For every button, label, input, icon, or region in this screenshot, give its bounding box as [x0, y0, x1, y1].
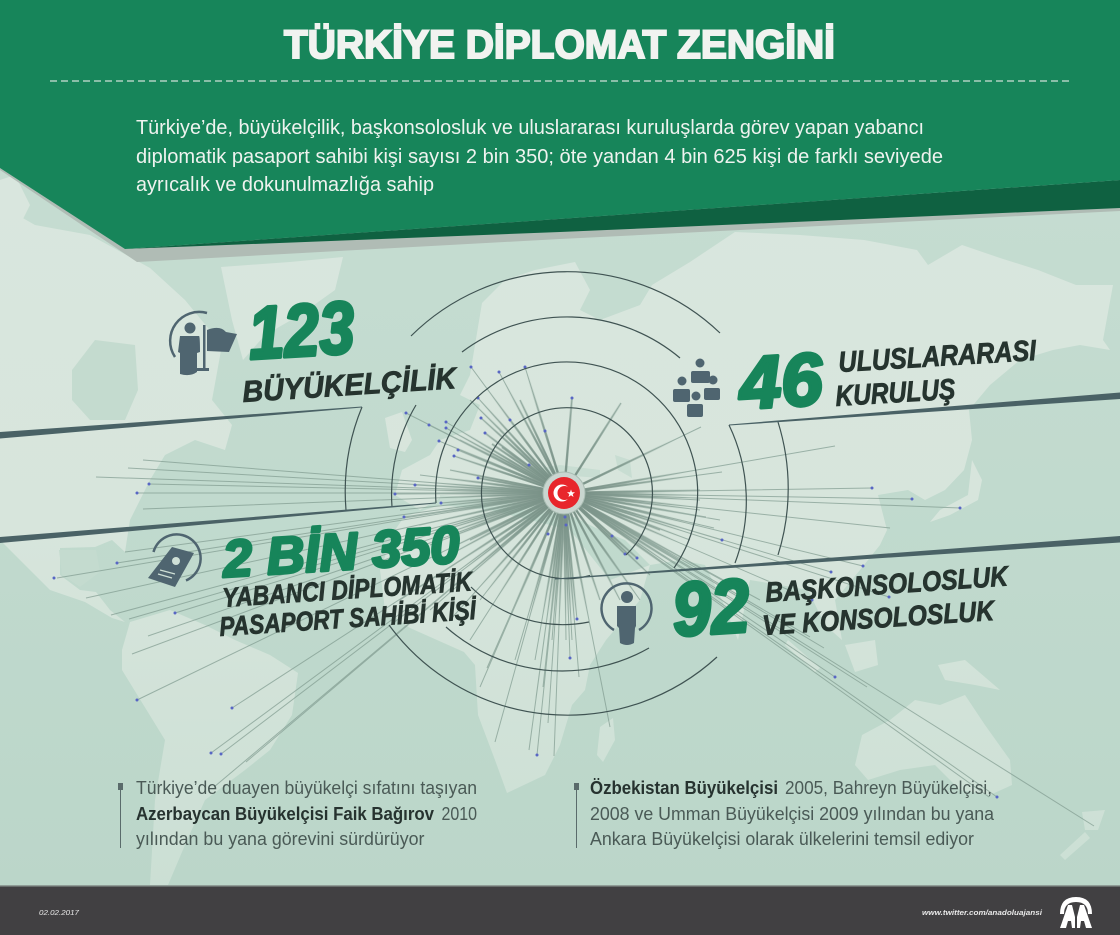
- Hudson Bay, inland waters: [72, 340, 138, 420]
- number 92: 92: [670, 563, 752, 653]
- number 46: 46: [735, 337, 826, 425]
- intro text: diplomatik pasaport sahibi kişi sayısı 2 bin 350; öte yandan 4 bin 625 kişi de farklı seviyede: [136, 145, 943, 168]
- stat: consulates: [602, 560, 1010, 653]
- note: left: 2010: [442, 803, 477, 824]
- note: right: Ankara Büyükelçisi olarak ülkelerini temsil ediyor: [590, 828, 974, 849]
- note: left: Azerbaycan Büyükelçisi Faik Bağırov: [136, 803, 435, 824]
- stat: embassies: [170, 286, 459, 409]
- intro text: ayrıcalık ve dokunulmazlığa sahip: [136, 173, 434, 196]
- footer bar: [0, 885, 1120, 935]
- label pasaport sahibi kişi: PASAPORT SAHİBİ KİŞİ: [218, 595, 478, 642]
- icon: agency logo: [1060, 897, 1092, 928]
- date: 02.02.2017: [39, 908, 80, 917]
- label yabancı diplomatik: YABANCI DİPLOMATİK: [221, 566, 475, 613]
- note: right: 2005, Bahreyn Büyükelçisi,: [785, 777, 992, 798]
- stat: diplomatic passport holders: [148, 516, 478, 642]
- embassy location dots: [54, 367, 997, 797]
- label başkonsolosluk: BAŞKONSOLOSLUK: [764, 560, 1010, 608]
- icon: diplomat with flag: [170, 312, 237, 375]
- turkish flag marker: [543, 472, 585, 514]
- number 2 bin 350: 2 BİN 350: [220, 516, 461, 589]
- header banner: [0, 0, 1120, 262]
- intro text: [136, 116, 943, 196]
- note: right: [574, 777, 995, 849]
- twitter url: www.twitter.com/anadoluajansi: [922, 908, 1043, 917]
- icon: four people: [673, 358, 720, 417]
- icon: passport: [148, 534, 201, 587]
- concentric range rings: [345, 272, 788, 715]
- note: left: Türkiye’de duayen büyükelçi sıfatını taşıyan: [136, 777, 477, 798]
- note: left: [118, 777, 477, 849]
- label kuruluş: KURULUŞ: [834, 374, 957, 413]
- intro text: Türkiye’de, büyükelçilik, başkonsolosluk ve uluslararası kuruluşlarda görev yapan yabancı: [136, 116, 924, 139]
- label ve konsolosluk: VE KONSOLOSLUK: [761, 595, 996, 641]
- dashed divider: [50, 80, 1070, 82]
- note: right: 2008 ve Umman Büyükelçisi 2009 yılından bu yana: [590, 803, 995, 824]
- note: right: Özbekistan Büyükelçisi: [590, 777, 778, 798]
- icon: consul: [602, 583, 652, 645]
- flight rays from Turkey: [57, 367, 1094, 826]
- title: TÜRKİYE DİPLOMAT ZENGİNİ: [284, 22, 835, 67]
- stat: international organisations: [673, 335, 1038, 425]
- label büyükelçilik: BÜYÜKELÇİLİK: [241, 362, 459, 409]
- divider lines: [0, 392, 1120, 580]
- number 123: 123: [246, 286, 357, 375]
- note: left: yılından bu yana görevini sürdürüyor: [136, 828, 424, 849]
- label uluslararası: ULUSLARARASI: [837, 335, 1038, 379]
